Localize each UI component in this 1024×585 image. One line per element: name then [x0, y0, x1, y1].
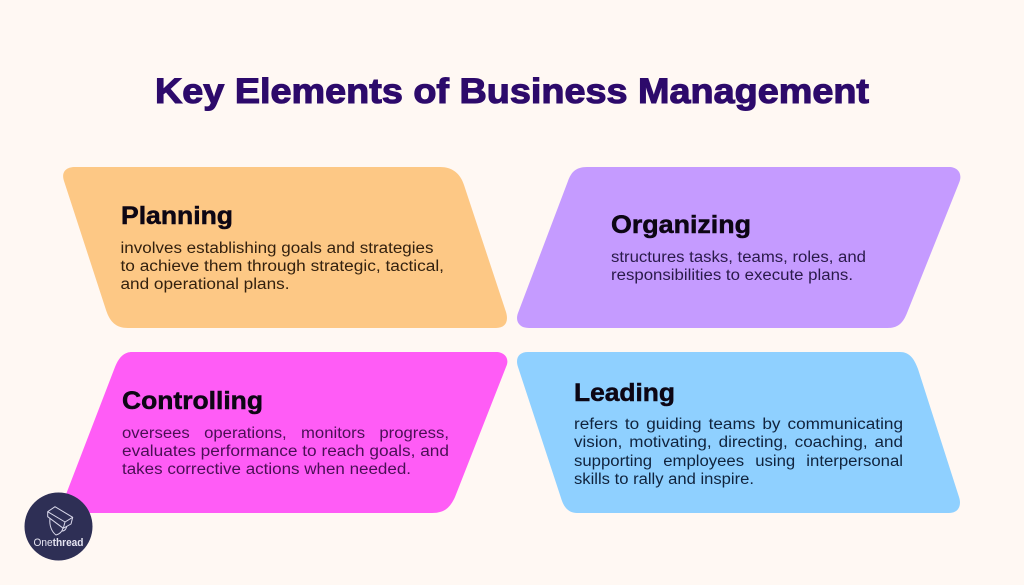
leading shape — [517, 352, 960, 513]
title: Key Elements of Business Management — [155, 72, 869, 111]
controlling shape — [64, 352, 507, 513]
leading body: refers to guiding teams by communicating — [574, 416, 903, 433]
planning shape — [63, 167, 507, 328]
organizing body — [611, 249, 866, 284]
leading body: skills to rally and inspire. — [574, 471, 754, 488]
organizing body: responsibilities to execute plans. — [611, 267, 853, 284]
leading body: vision, motivating, directing, coaching, and — [574, 434, 903, 451]
panel: leading — [517, 352, 960, 513]
leading heading: Leading — [574, 379, 675, 407]
controlling body: evaluates performance to reach goals, and — [122, 443, 449, 460]
controlling body: takes corrective actions when needed. — [122, 461, 411, 478]
controlling body — [122, 425, 449, 478]
planning heading: Planning — [121, 202, 233, 230]
leading body: supporting employees using interpersonal — [574, 453, 903, 470]
panel: controlling — [64, 352, 507, 513]
organizing body: structures tasks, teams, roles, and — [611, 249, 866, 266]
organizing heading: Organizing — [611, 211, 751, 239]
planning body: to achieve them through strategic, tactical, — [120, 258, 444, 275]
controlling body: oversees operations, monitors progress, — [122, 425, 449, 442]
logo badge — [24, 492, 92, 560]
panel: organizing — [517, 167, 960, 328]
planning body: and operational plans. — [120, 276, 290, 293]
logo wordmark: Onethread — [34, 537, 84, 549]
organizing shape — [517, 167, 960, 328]
logo icon — [48, 507, 73, 535]
planning body: involves establishing goals and strategies — [120, 240, 434, 257]
controlling heading: Controlling — [122, 387, 263, 415]
planning body — [120, 240, 444, 293]
leading body — [574, 416, 903, 488]
panel: planning — [63, 167, 507, 328]
logo: Onethread — [24, 492, 92, 560]
